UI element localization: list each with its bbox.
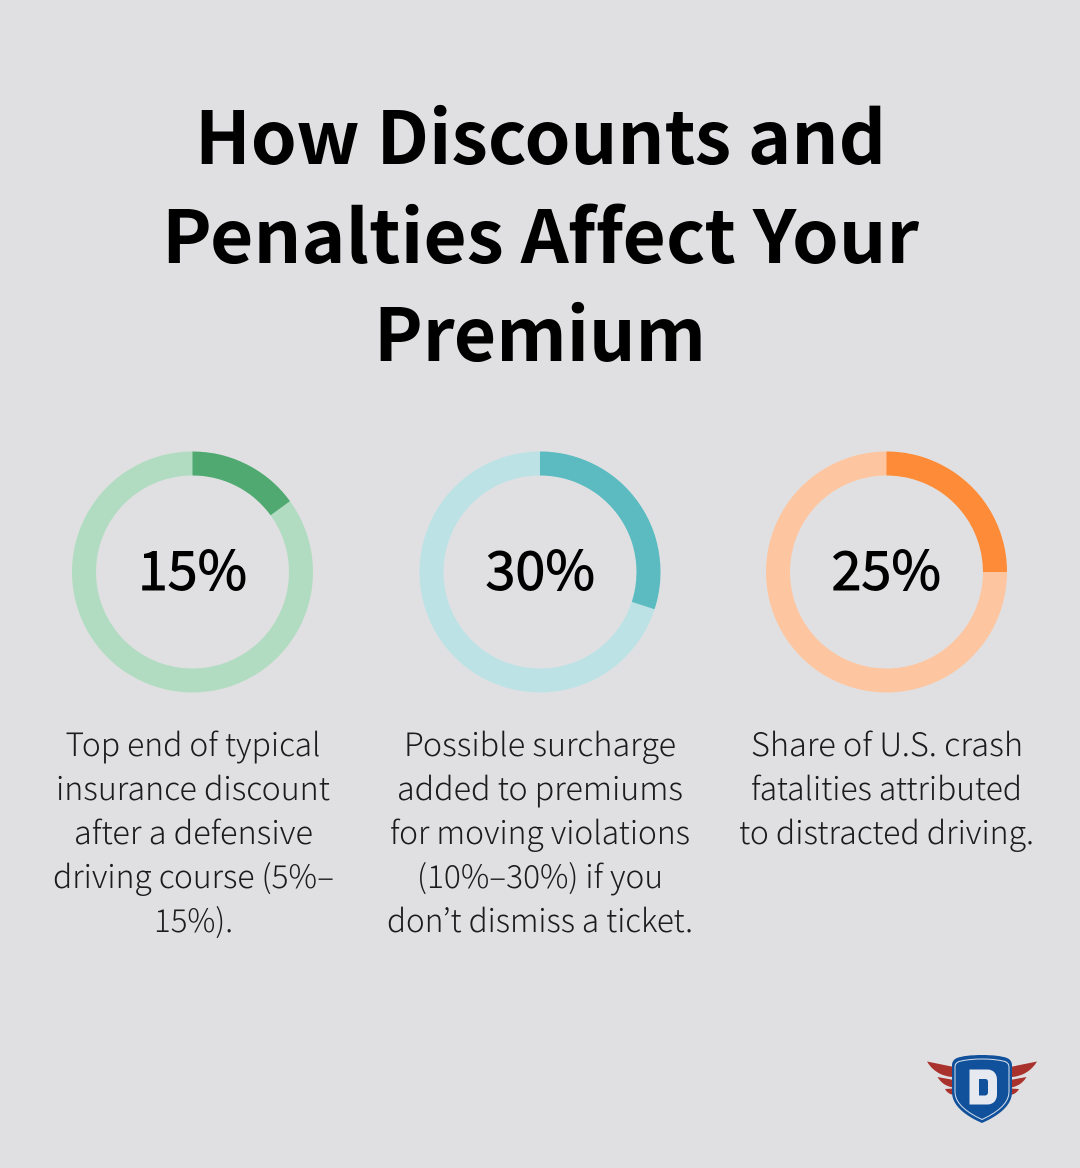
donut chart: 15%: 15% [138,527,247,606]
description: 25%: fatalities attributed [751,764,1022,810]
donut chart: 30% [432,464,649,680]
panel: 15% discount [53,464,334,942]
description: 25%: to distracted driving. [739,808,1034,854]
logo: winged shield [927,1055,1037,1123]
donut chart: 30%: 30% [486,527,595,606]
donut chart: 15% [84,464,301,680]
description: 25%: Share of U.S. crash [751,720,1023,766]
letter D [970,1070,997,1104]
title: Premium [374,277,706,383]
left wing [927,1062,955,1095]
right wing [1009,1062,1037,1095]
shield [952,1055,1012,1123]
description: 30%: don’t dismiss a ticket. [387,896,693,942]
donut chart: 25%: 25% [832,527,941,606]
shield inner outline [955,1059,1009,1120]
description: 15%: insurance discount [56,764,330,810]
title: Penalties Affect Your [162,179,919,285]
description: 25% [739,720,1034,854]
description: 15%: 15%). [154,896,233,942]
title [162,80,919,383]
description: 30%: added to premiums [397,764,683,810]
donut chart: 25% [778,464,995,680]
panel: 25% fatalities [739,464,1034,854]
description: 15%: after a defensive [74,808,313,854]
description: 15%: Top end of typical [66,720,320,766]
panel: 30% surcharge [387,464,693,942]
description: 30%: Possible surcharge [404,720,676,766]
description: 30%: (10%–30%) if you [417,852,663,898]
description: 15% [53,720,334,942]
description: 30%: for moving violations [390,808,690,854]
description: 15%: driving course (5%– [53,852,334,898]
title: How Discounts and [195,80,886,186]
description: 30% [387,720,693,942]
